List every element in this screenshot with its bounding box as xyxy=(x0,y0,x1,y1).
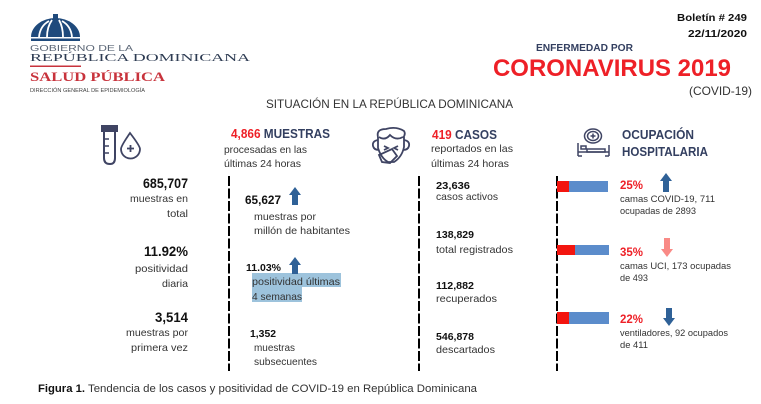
panel: muestras totals: positividad xyxy=(135,263,188,275)
panel: muestras detail: millón de habitantes xyxy=(254,225,350,237)
bulletin number and date: 22/11/2020 xyxy=(688,28,747,40)
icon: blood drop xyxy=(121,133,140,159)
arrow: down xyxy=(663,308,675,326)
heading: muestras xyxy=(224,127,330,170)
arrow: down xyxy=(661,238,673,257)
panel: muestras detail: 1,352 xyxy=(250,328,276,340)
panel: casos detail: casos activos xyxy=(436,191,498,203)
divider xyxy=(228,176,230,371)
arrow: up xyxy=(660,173,672,192)
heading: muestras: 4,866 MUESTRAS xyxy=(231,127,330,141)
panel: casos detail xyxy=(436,180,513,356)
bar: camas UCI xyxy=(557,245,609,255)
stat: camas UCI xyxy=(620,238,732,283)
panel: muestras detail: 11.03% xyxy=(246,262,282,274)
title: (COVID-19) xyxy=(689,84,752,98)
stat: camas UCI: de 493 xyxy=(620,273,648,283)
panel: muestras totals: total xyxy=(167,208,188,220)
title: CORONAVIRUS 2019 xyxy=(493,55,731,82)
logo: Gobierno de la República Dominicana xyxy=(30,14,251,94)
stat: ventiladores xyxy=(620,308,729,350)
stat: camas UCI: camas UCI, 173 ocupadas xyxy=(620,261,732,271)
stat: ventiladores: de 411 xyxy=(620,340,648,350)
arrow: up xyxy=(289,257,301,274)
figure caption: Figura 1. xyxy=(38,383,85,395)
heading: muestras: últimas 24 horas xyxy=(224,158,301,170)
panel: casos detail: descartados xyxy=(436,344,495,356)
title: ENFERMEDAD POR xyxy=(536,42,633,54)
heading: ocupación hospitalaria: HOSPITALARIA xyxy=(622,144,709,159)
stat: camas COVID-19 xyxy=(620,173,715,216)
divider xyxy=(556,176,558,371)
divider xyxy=(418,176,420,371)
panel: muestras detail: muestras por xyxy=(254,211,317,223)
stat: camas UCI: 35% xyxy=(620,245,643,259)
panel: casos detail: 138,829 xyxy=(436,229,474,241)
panel: muestras totals: 3,514 xyxy=(155,310,188,325)
bulletin number and date xyxy=(677,12,747,40)
bar: ventiladores xyxy=(557,312,609,324)
heading: casos: 419 CASOS xyxy=(432,128,497,142)
bulletin number and date: Boletín # 249 xyxy=(677,12,747,24)
panel: muestras totals: muestras por xyxy=(126,327,189,339)
highlight xyxy=(252,273,341,302)
title xyxy=(493,42,752,98)
panel: muestras detail: 65,627 xyxy=(245,193,281,207)
panel: muestras totals: muestras en xyxy=(130,193,188,205)
panel: muestras detail xyxy=(245,187,350,368)
panel: muestras totals: diaria xyxy=(162,278,188,290)
panel: muestras totals: primera vez xyxy=(131,342,188,354)
icon: dome xyxy=(31,14,80,41)
logo: Gobierno de la República Dominicana: GOBIERNO DE LA xyxy=(30,44,134,53)
panel: muestras totals xyxy=(126,176,189,354)
panel: muestras detail: positividad últimas xyxy=(252,276,340,288)
panel: casos detail: recuperados xyxy=(436,293,497,305)
bar: camas COVID-19 xyxy=(557,181,608,192)
heading: casos: últimas 24 horas xyxy=(431,158,509,170)
panel: muestras detail: 4 semanas xyxy=(252,291,302,303)
logo: Gobierno de la República Dominicana: SALUD PÚBLICA xyxy=(30,69,166,84)
heading: casos xyxy=(431,128,513,170)
logo: Gobierno de la República Dominicana: REPÚBLICA DOMINICANA xyxy=(30,52,251,64)
panel: casos detail: 546,878 xyxy=(436,331,474,343)
panel: muestras detail: subsecuentes xyxy=(254,356,317,368)
figure caption: Tendencia de los casos y positividad de COVID-19 en República Dominicana xyxy=(88,383,478,395)
panel: muestras totals: 11.92% xyxy=(144,244,188,259)
logo: Gobierno de la República Dominicana: DIRECCIÓN GENERAL DE EPIDEMIOLOGÍA xyxy=(30,87,145,94)
icon: face with mask xyxy=(373,128,409,163)
panel: casos detail: 23,636 xyxy=(436,180,470,192)
heading: muestras: procesadas en las xyxy=(224,144,307,156)
panel: casos detail: 112,882 xyxy=(436,280,474,292)
panel: muestras detail: muestras xyxy=(254,342,295,354)
heading: ocupación hospitalaria xyxy=(622,127,709,159)
heading: casos: reportados en las xyxy=(431,143,513,155)
icon: hospital bed xyxy=(578,129,609,156)
stat: ventiladores: 22% xyxy=(620,312,643,326)
panel: casos detail: total registrados xyxy=(436,244,513,256)
stat: camas COVID-19: 25% xyxy=(620,178,643,192)
subtitle: SITUACIÓN EN LA REPÚBLICA DOMINICANA xyxy=(266,96,513,111)
stat: camas COVID-19: ocupadas de 2893 xyxy=(620,206,696,216)
arrow: up xyxy=(289,187,301,205)
stat: camas COVID-19: camas COVID-19, 711 xyxy=(620,194,715,204)
stat: ventiladores: ventiladores, 92 ocupados xyxy=(620,328,729,338)
icon: test tube xyxy=(102,126,117,164)
heading: ocupación hospitalaria: OCUPACIÓN xyxy=(622,127,694,142)
panel: muestras totals: 685,707 xyxy=(143,176,188,191)
